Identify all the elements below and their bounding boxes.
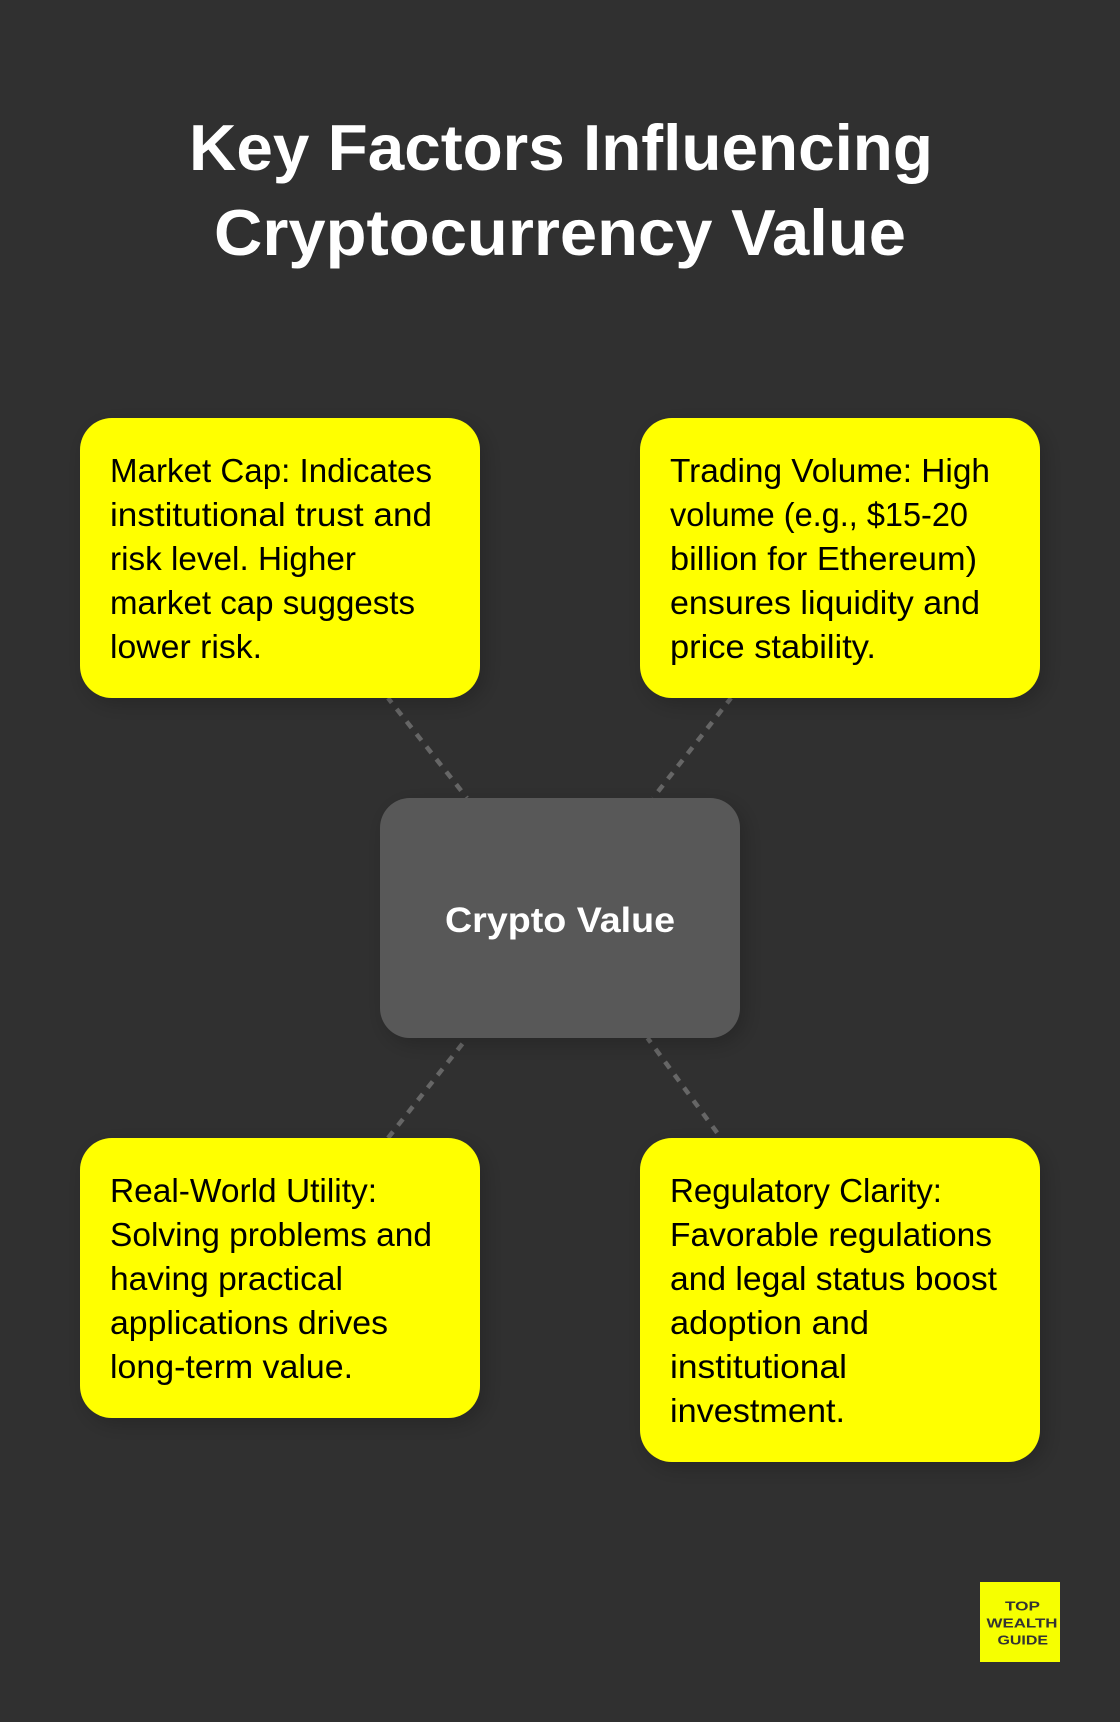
panel: trading volume: ensures liquidity and	[670, 584, 980, 621]
panel: regulatory clarity: Favorable regulations	[670, 1216, 992, 1253]
panel: market cap: market cap suggests	[110, 584, 415, 621]
panel: market cap: risk level. Higher	[110, 540, 356, 577]
panel: real-world utility: applications drives	[110, 1304, 388, 1341]
title	[189, 111, 933, 269]
panel: market cap	[80, 418, 480, 698]
panel: center node	[380, 798, 740, 1038]
title: Cryptocurrency Value	[214, 196, 906, 269]
logo: Top Wealth Guide: WEALTH	[986, 1616, 1058, 1630]
panel: trading volume: volume (e.g., $15-20	[670, 496, 968, 533]
panel: regulatory clarity: and legal status boost	[670, 1260, 997, 1297]
panel: trading volume: Trading Volume: High	[670, 452, 990, 489]
panel: real-world utility: Solving problems and	[110, 1216, 432, 1253]
panel: real-world utility: having practical	[110, 1260, 343, 1297]
logo: Top Wealth Guide: TOP	[1005, 1600, 1040, 1614]
panel: regulatory clarity: investment.	[670, 1392, 845, 1429]
panel: market cap: Market Cap: Indicates	[110, 452, 432, 489]
title: Key Factors Influencing	[189, 111, 933, 184]
panel: regulatory clarity: adoption and	[670, 1304, 869, 1341]
panel: trading volume	[640, 418, 1040, 698]
panel: regulatory clarity	[640, 1138, 1040, 1462]
panel: regulatory clarity: institutional	[670, 1348, 847, 1385]
logo: Top Wealth Guide: GUIDE	[998, 1634, 1048, 1648]
panel: real-world utility: long-term value.	[110, 1348, 353, 1385]
panel: market cap: lower risk.	[110, 628, 262, 665]
panel: real-world utility: Real-World Utility:	[110, 1172, 377, 1209]
panel: market cap: institutional trust and	[110, 496, 432, 533]
panel: trading volume: billion for Ethereum)	[670, 540, 977, 577]
panel: regulatory clarity: Regulatory Clarity:	[670, 1172, 942, 1209]
dashed connectors from the center node to the four factor cards	[388, 698, 731, 1138]
panel: real-world utility	[80, 1138, 480, 1418]
logo: Top Wealth Guide	[980, 1582, 1060, 1662]
panel: trading volume: price stability.	[670, 628, 876, 665]
panel: center node: Crypto Value	[445, 901, 675, 940]
